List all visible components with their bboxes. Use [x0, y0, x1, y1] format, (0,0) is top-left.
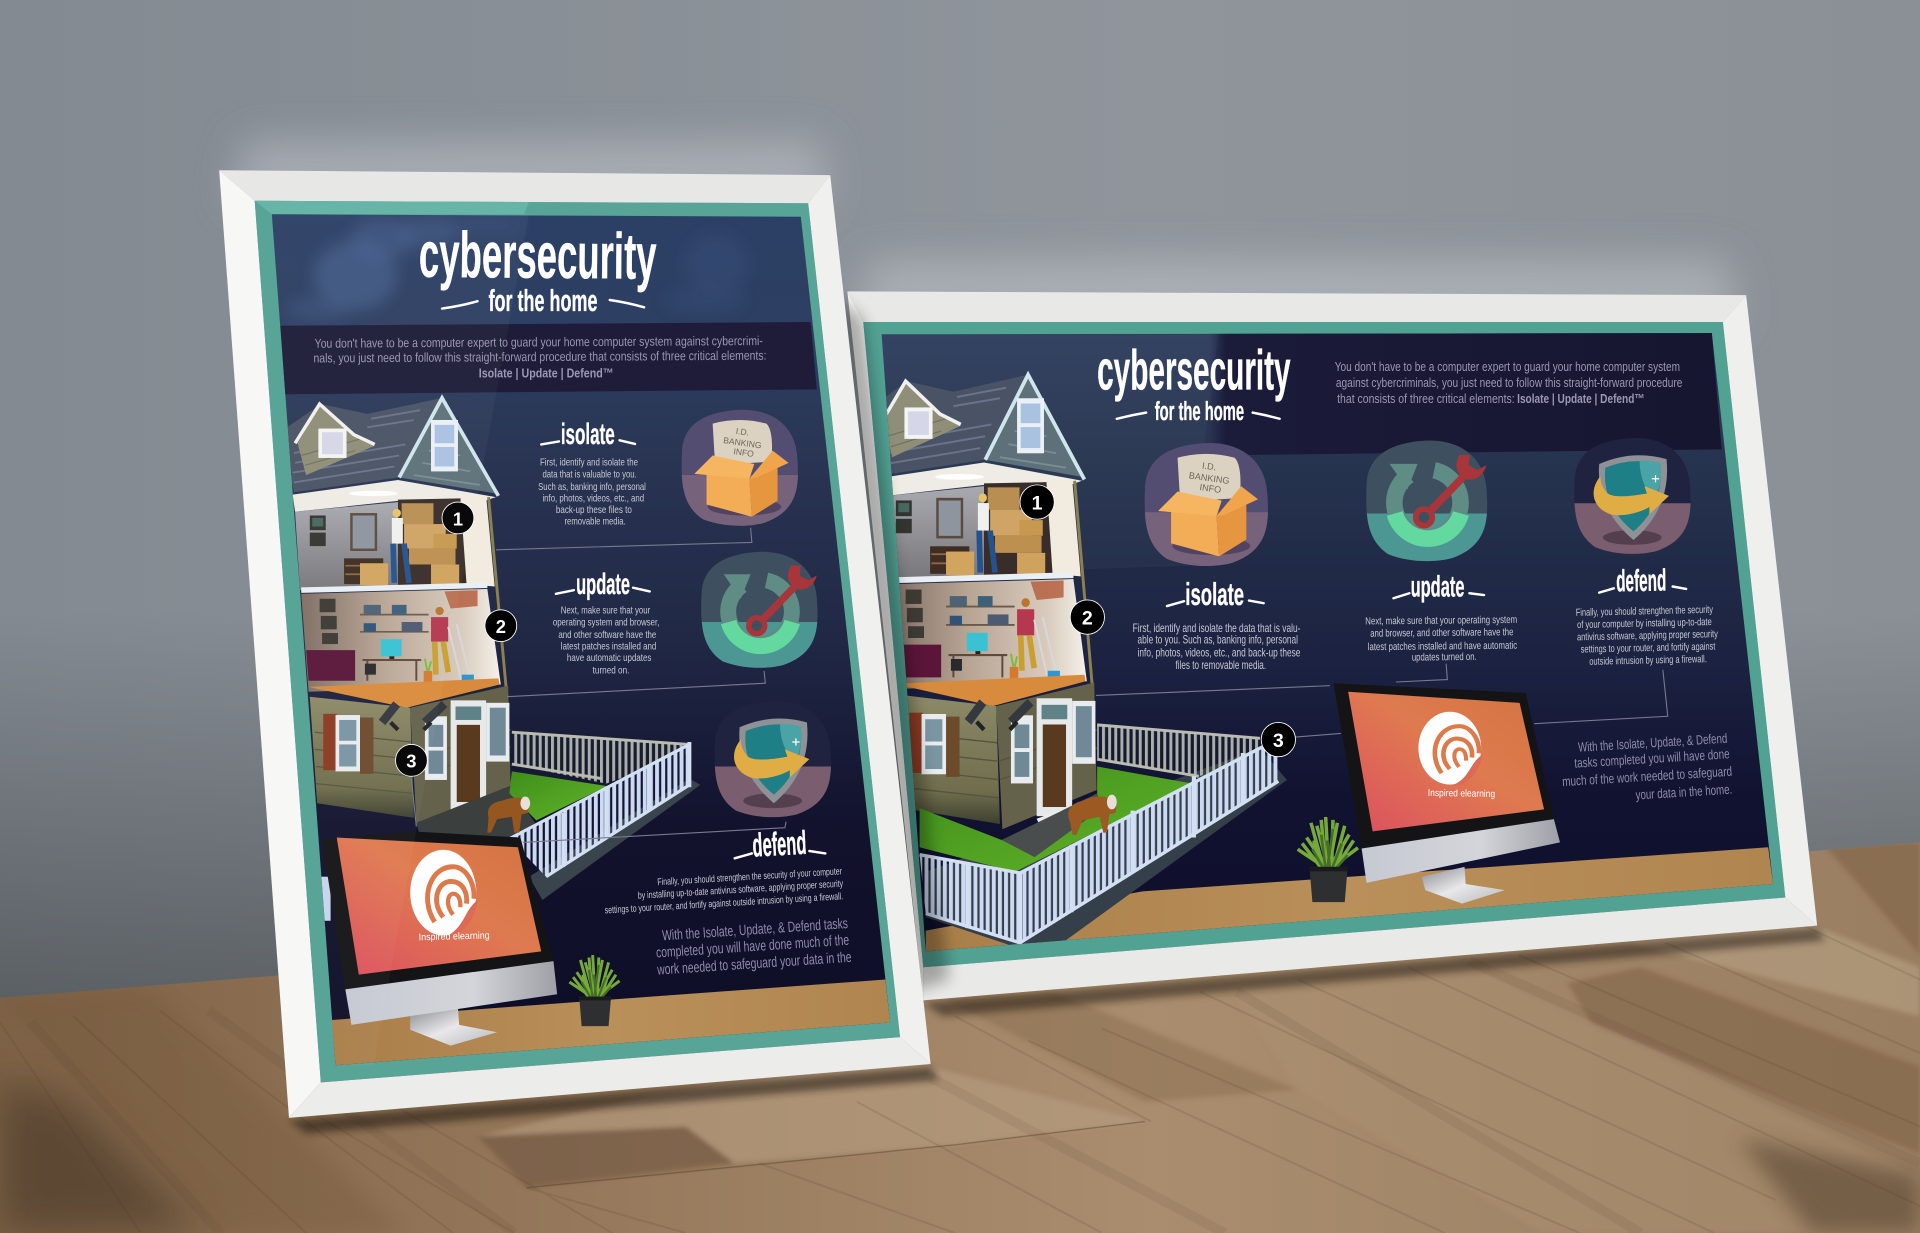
title [419, 218, 657, 318]
isolate body text [538, 457, 646, 528]
update body text: operating system and browser, [553, 618, 659, 629]
update body text: updates turned on. [1412, 652, 1477, 664]
desktop monitor: Inspired elearning [419, 931, 490, 943]
dog [487, 796, 530, 833]
front yard with fence [920, 725, 1287, 949]
closing text: With the Isolate, Update, & Defend [1578, 731, 1728, 755]
intro text: that consists of three critical elements: [1337, 391, 1515, 406]
update heading [1393, 570, 1484, 603]
title [1097, 338, 1291, 426]
intro text: nals, you just need to follow this straight-forward procedure that consists of three critical elements: [313, 348, 767, 365]
title: cybersecurity [419, 218, 657, 293]
title: cybersecurity [1097, 338, 1291, 401]
icon: defend shield [1571, 438, 1693, 557]
shadow of portrait poster onto landscape poster [830, 294, 949, 992]
icon: update wrench [698, 552, 820, 671]
icon: update wrench [1363, 440, 1490, 564]
clouds [287, 217, 748, 320]
glass reflection [272, 214, 529, 1065]
closing text: work needed to safeguard your data in the [656, 950, 852, 979]
defend body text [1576, 605, 1719, 668]
defend body text: antivirus software, applying proper security [1577, 629, 1719, 643]
isolate body text: Such as, banking info, personal [538, 482, 646, 493]
isolate body text [1133, 622, 1300, 672]
update body text [1365, 615, 1517, 664]
closing text: your data in the home. [1635, 782, 1733, 803]
defend body text: of your computer by installing up-to-date [1577, 617, 1712, 631]
wooden desk strip [332, 980, 890, 1065]
title: for the home [1155, 398, 1244, 426]
update heading: update [576, 568, 630, 601]
update body text: and other software have the [558, 630, 656, 641]
update body text: and browser, and other software have the [1370, 627, 1514, 640]
defend body text [604, 866, 844, 916]
isolate body text: removable media. [564, 517, 626, 528]
desktop monitor [1333, 683, 1560, 904]
number badges [396, 502, 517, 776]
intro band [280, 322, 817, 394]
number badges [1020, 485, 1296, 757]
isolate body text: First, identify and isolate the [540, 457, 638, 468]
poster background [272, 214, 890, 1065]
intro text: against cybercriminals, you just need to follow this straight-forward procedure [1336, 375, 1682, 390]
defend body text: by installing up-to-date antivirus software, applying proper security [637, 879, 844, 902]
update body text: Next, make sure that your [561, 605, 651, 616]
closing text [656, 916, 852, 979]
house cutaway [871, 375, 1097, 829]
number badges: 2 [1082, 607, 1093, 629]
isolate body text: able to you. Such as, banking info, personal [1138, 633, 1298, 646]
defend body text: settings to your router, and fortify against outside intrusion by using a firewall. [604, 891, 843, 916]
intro text [1335, 359, 1682, 406]
defend heading [735, 825, 825, 865]
number badges: 2 [496, 616, 506, 637]
update heading [556, 568, 650, 601]
panel: portrait poster (left) [219, 170, 931, 1118]
desktop monitor: Inspired elearning [1428, 788, 1495, 800]
intro text: Isolate | Update | Defend™ [479, 366, 613, 381]
update heading: update [1411, 570, 1464, 603]
isolate body text: info, photos, videos, etc., and back-up these [1138, 646, 1300, 659]
plant [569, 955, 620, 1026]
desktop monitor [322, 831, 557, 1046]
closing text [1562, 731, 1733, 803]
update body text: latest patches installed and [561, 642, 656, 653]
update body text: turned on. [593, 665, 629, 676]
house cutaway [285, 398, 511, 823]
isolate body text: data that is valuable to you. [542, 470, 637, 481]
dog [1068, 795, 1117, 835]
number badges: 3 [406, 751, 417, 772]
isolate heading: isolate [561, 418, 615, 451]
background: wooden floor [0, 842, 1920, 1233]
panel: landscape poster (right) [847, 291, 1817, 1000]
intro text: You don't have to be a computer expert to guard your home computer system [1335, 359, 1680, 374]
isolate body text: back-up these files to [556, 505, 632, 516]
intro text [313, 333, 767, 381]
plant [1298, 817, 1358, 902]
update body text: Next, make sure that your operating system [1365, 615, 1517, 627]
icon: isolate box [1141, 443, 1271, 577]
isolate body text: info, photos, videos, etc., and [542, 493, 644, 504]
update body text: latest patches installed and have automatic [1368, 641, 1517, 653]
connector lines [411, 528, 786, 842]
isolate heading [541, 418, 635, 451]
closing text: much of the work needed to safeguard [1562, 764, 1733, 789]
number badges: 3 [1273, 730, 1284, 752]
defend heading: defend [752, 825, 807, 865]
defend heading [1599, 564, 1686, 598]
defend body text: Finally, you should strengthen the security of your computer [657, 866, 843, 888]
isolate body text: First, identify and isolate the data that is valu- [1133, 622, 1300, 635]
intro text: Isolate | Update | Defend™ [1517, 391, 1644, 406]
update body text: have automatic updates [567, 653, 651, 664]
poster contact shadows [289, 928, 1824, 1134]
poster background [882, 333, 1773, 951]
defend body text: outside intrusion by using a firewall. [1589, 654, 1707, 668]
closing text: tasks completed you will have done [1574, 746, 1730, 771]
defend heading: defend [1616, 564, 1667, 598]
picture frame [219, 170, 931, 1118]
picture frame [847, 291, 1817, 1000]
isolate heading: isolate [1185, 576, 1244, 612]
connector lines [1096, 664, 1668, 737]
closing text: completed you will have done much of the [656, 933, 850, 961]
number badges: 1 [1032, 492, 1043, 514]
title: for the home [489, 284, 598, 318]
wooden desk strip [926, 847, 1773, 951]
icon: defend shield [711, 701, 834, 820]
isolate body text: files to removable media. [1176, 659, 1266, 672]
defend body text: Finally, you should strengthen the security [1576, 605, 1714, 619]
icon: isolate box [678, 410, 801, 536]
isolate heading [1167, 576, 1264, 612]
number badges: 1 [453, 508, 463, 529]
defend body text: settings to your router, and fortify against [1581, 642, 1716, 656]
front yard with fence [321, 732, 700, 921]
update body text [553, 605, 659, 676]
intro text: You don't have to be a computer expert to guard your home computer system against cybercrimi- [315, 333, 763, 351]
closing text: With the Isolate, Update, & Defend tasks [662, 916, 848, 944]
